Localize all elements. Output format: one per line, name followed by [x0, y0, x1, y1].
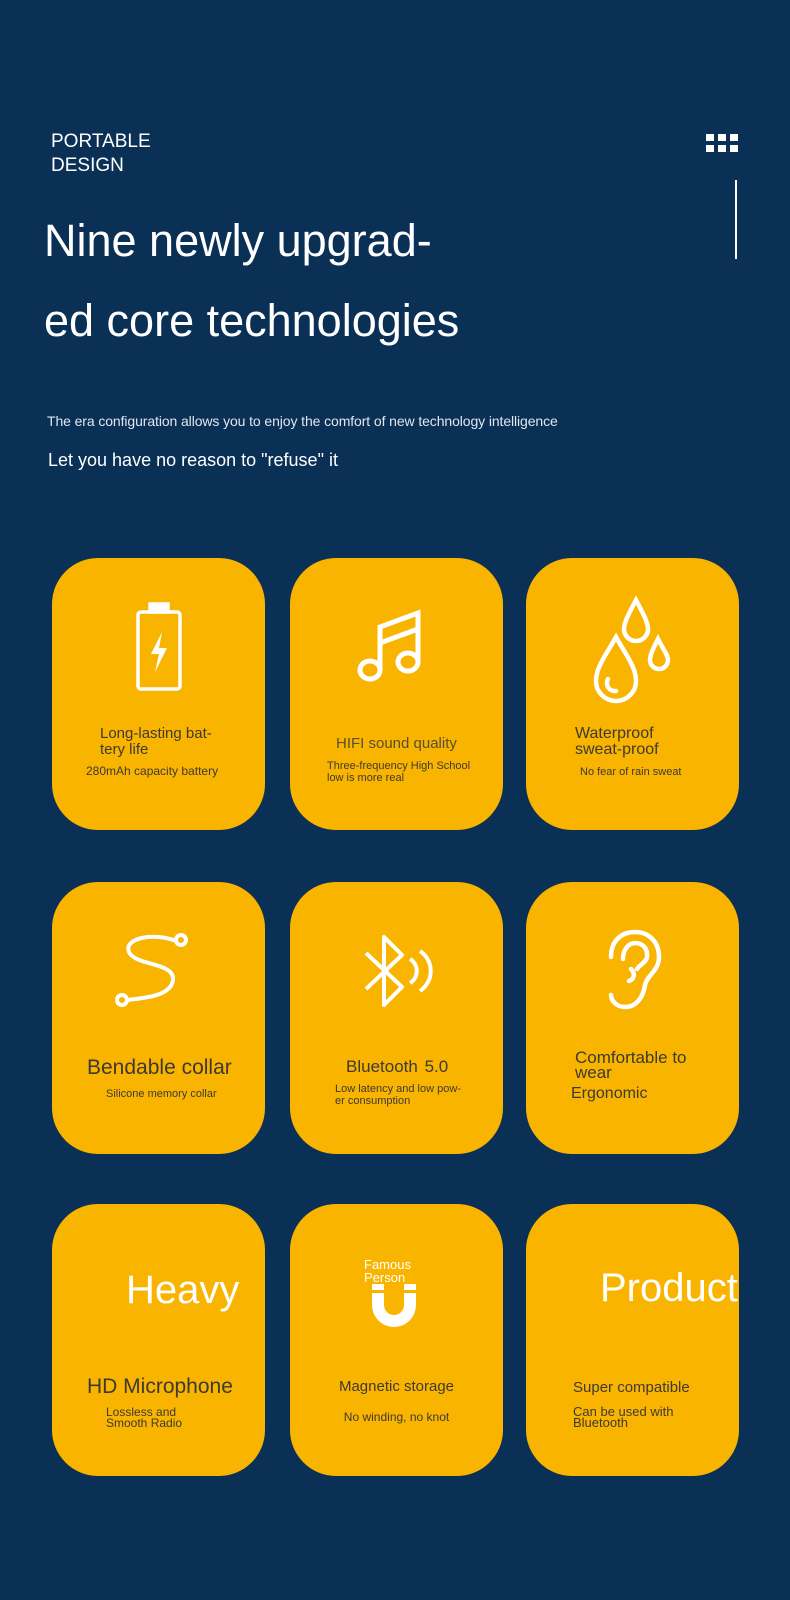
text: battery	[100, 725, 212, 758]
card: battery: 280mAh capacity battery	[86, 764, 218, 778]
text: bendable: Bendable collar	[87, 1056, 232, 1079]
title	[44, 215, 459, 346]
label: portable design: DESIGN	[51, 155, 124, 176]
label: portable design: PORTABLE	[51, 131, 151, 152]
card: waterproof	[526, 558, 739, 830]
card: ergonomic: Ergonomic	[571, 1085, 647, 1102]
card: compatible: Bluetooth	[573, 1415, 628, 1430]
card: hifi: low is more real	[327, 772, 404, 784]
icon: bluetooth	[364, 935, 433, 1008]
text: famous person: Person	[364, 1270, 405, 1285]
card: bluetooth: Low latency and low pow-	[335, 1083, 461, 1095]
text: waterproof: Waterproof	[575, 725, 654, 742]
text: battery: Long-lasting bat-	[100, 725, 212, 742]
icon: grid	[706, 134, 738, 152]
card: compatible: Can be used with	[573, 1404, 673, 1419]
card: battery	[52, 558, 265, 830]
card: microphone: Lossless and	[106, 1405, 176, 1419]
text: microphone: HD Microphone	[87, 1375, 233, 1398]
text: waterproof: sweat-proof	[575, 741, 659, 758]
icon: s curve	[115, 933, 188, 1007]
card: bluetooth: er consumption	[335, 1095, 410, 1107]
title: ed core technologies	[44, 295, 459, 346]
vertical line	[735, 180, 737, 259]
text: waterproof	[575, 725, 659, 758]
icon: battery	[136, 602, 182, 691]
icon: drops	[594, 595, 670, 704]
card: magnetic	[290, 1204, 503, 1476]
card: ergonomic	[526, 882, 739, 1154]
text: battery: tery life	[100, 741, 148, 758]
card: hifi: Three-frequency High School	[327, 760, 470, 772]
card: compatible	[526, 1204, 739, 1476]
card: waterproof: No fear of rain sweat	[580, 766, 682, 778]
card: bluetooth	[290, 882, 503, 1154]
icon: ear	[608, 930, 662, 1010]
label: portable design	[51, 131, 151, 176]
text: ergonomic	[575, 1048, 686, 1082]
text: compatible: Super compatible	[573, 1379, 690, 1396]
text: magnetic: Magnetic storage	[339, 1378, 454, 1395]
text: famous person	[364, 1257, 411, 1285]
card: bendable: Silicone memory collar	[106, 1088, 217, 1100]
icon: music note	[358, 609, 420, 682]
text: ergonomic: wear	[575, 1063, 612, 1082]
text: famous person: Famous	[364, 1257, 411, 1272]
card: microphone: Smooth Radio	[106, 1416, 182, 1430]
card: hifi	[290, 558, 503, 830]
card: bendable	[52, 882, 265, 1154]
icon: magnet	[372, 1284, 416, 1327]
text: hifi: HIFI sound quality	[336, 735, 457, 752]
text: bluetooth: Bluetooth 5.0	[346, 1057, 448, 1076]
subtitle: The era configuration allows you to enjoy the comfort of new technology intelligence	[47, 413, 558, 429]
card: microphone	[52, 1204, 265, 1476]
title: Nine newly upgrad-	[44, 215, 432, 266]
text: ergonomic: Comfortable to	[575, 1048, 686, 1067]
text: product: Product	[600, 1266, 738, 1310]
text: heavy: Heavy	[126, 1268, 239, 1312]
tagline: Let you have no reason to "refuse" it	[48, 450, 338, 470]
card: magnetic: No winding, no knot	[344, 1410, 449, 1424]
